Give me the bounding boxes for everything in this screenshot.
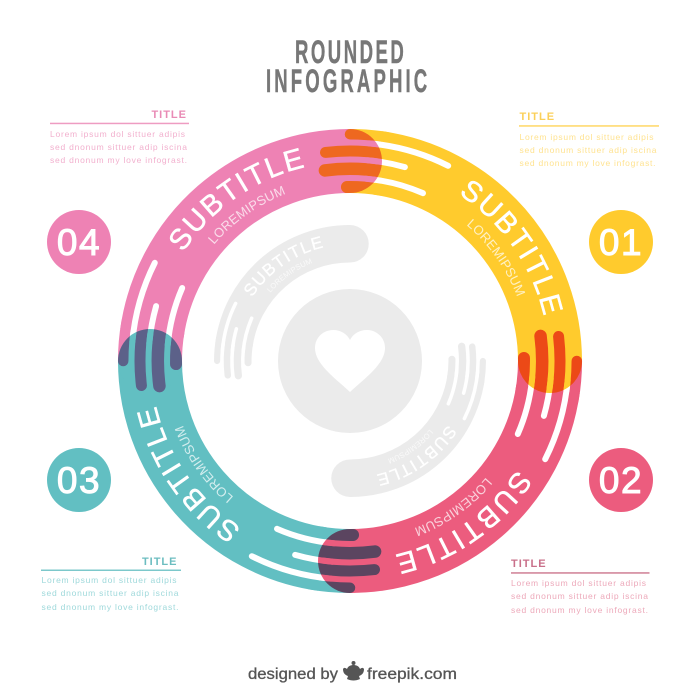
center circle with heart [278,289,422,433]
number badge 01 [589,210,653,274]
text block: teal title and lorem: sed dnonum my love infograst. [42,602,178,612]
grey mini arc upper left: SUBTITLE [244,236,323,296]
ring segment: yellow 01 [318,129,582,393]
number badge 04: 04 [57,222,101,263]
text block: pink title and lorem: sed dnonum my love infograst. [50,155,187,165]
ring segment: yellow 01: LOREMIPSUM [467,219,526,296]
number badge 03: 03 [57,460,101,501]
text block: yellow title and lorem: TITLE [520,111,555,123]
grey mini arc lower right: SUBTITLE [377,426,456,486]
grey mini arc upper left [214,225,369,380]
text block: yellow title and lorem: Lorem ipsum dol sittuer adipis [520,132,654,142]
footer credit: designed by [248,666,338,683]
number badge 02: 02 [599,460,643,501]
footer credit [248,661,457,683]
text block: pink title and lorem: sed dnonum sittuer adip iscina [50,142,187,152]
text block: teal title and lorem: sed dnonum sittuer adip iscina [42,588,179,598]
number badge 01: 01 [599,222,643,263]
text block: yellow title and lorem [519,111,659,168]
grey mini arc lower right [331,342,486,497]
ring segment: red 02 [318,330,582,593]
ring segment: red 02: LOREMIPSUM [415,478,492,536]
text block: red title and lorem: Lorem ipsum dol sittuer adipis [511,578,646,588]
ring segment: pink 04 [118,129,382,392]
number badge 03 [47,448,111,512]
ring segment: pink 04: SUBTITLE [170,148,304,250]
ring segment: teal 03: LOREMIPSUM [174,426,233,503]
text block: yellow title and lorem: sed dnonum sittuer adip iscina [520,145,657,155]
footer credit: freepik.com [367,666,457,683]
ring segment: teal 03 [118,329,382,593]
number badge 02 [589,448,653,512]
text block: pink title and lorem: Lorem ipsum dol sittuer adipis [50,129,185,139]
text block: teal title and lorem [41,556,181,612]
text block: red title and lorem [511,558,650,615]
text block: red title and lorem: TITLE [511,558,547,570]
text block: red title and lorem: sed dnonum my love infograst. [511,605,648,615]
text block: pink title and lorem [50,109,189,165]
title [266,34,430,99]
grey mini arc upper left: LOREMIPSUM [267,258,312,292]
ring segment: red 02: SUBTITLE [396,472,530,574]
text block: yellow title and lorem: sed dnonum my love infograst. [520,158,656,168]
ring segment: pink 04: LOREMIPSUM [208,186,285,244]
ring segment: teal 03: SUBTITLE [136,406,238,542]
text block: red title and lorem: sed dnonum sittuer adip iscina [511,591,648,601]
text block: pink title and lorem: TITLE [151,109,187,121]
number badge 04 [47,210,111,274]
text block: teal title and lorem: TITLE [142,556,178,568]
text block: teal title and lorem: Lorem ipsum dol sittuer adipis [42,575,176,585]
ring segment: yellow 01: SUBTITLE [462,180,564,316]
title: INFOGRAPHIC [266,63,430,99]
grey mini arc lower right: LOREMIPSUM [388,430,433,464]
title: ROUNDED [295,34,406,70]
